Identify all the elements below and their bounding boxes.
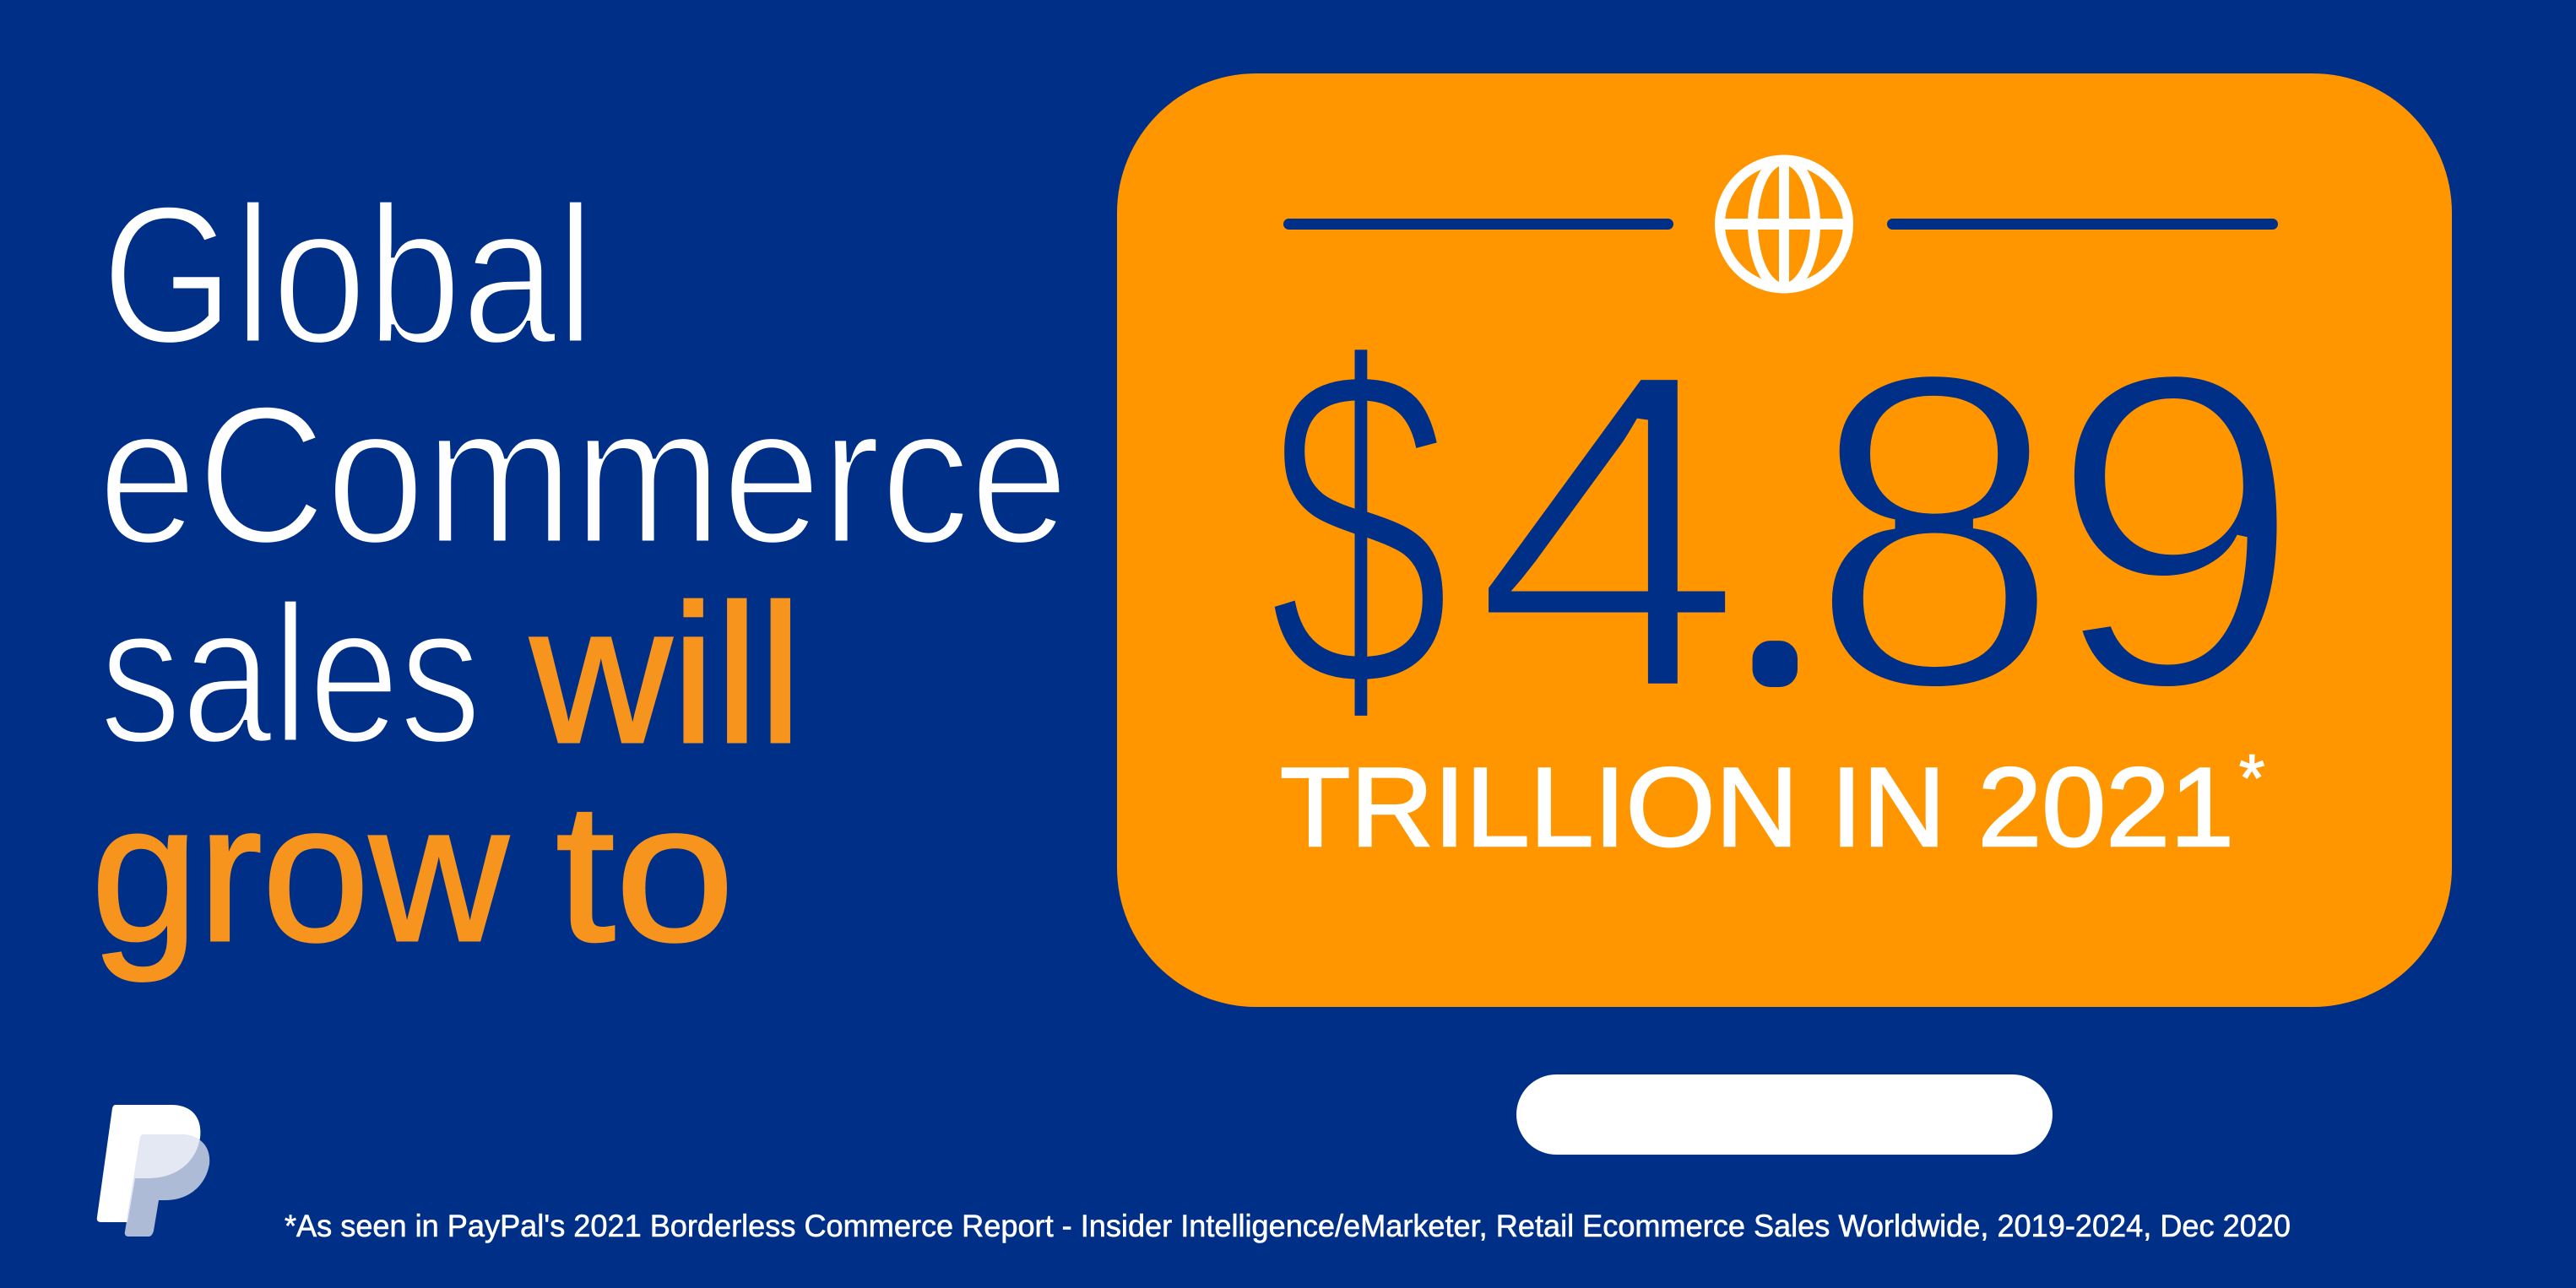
heading line: Global: Global <box>101 165 594 385</box>
heading highlight: will: will <box>529 565 802 784</box>
glyph: eight: 8 <box>1807 279 2063 783</box>
icon: PayPal logo <box>97 1105 209 1237</box>
icon: globe <box>1720 160 1848 289</box>
pill: white redacted bar <box>1516 1074 2053 1155</box>
heading <box>91 165 1069 982</box>
logo overlap <box>127 1134 199 1222</box>
glyph: nine: 9 <box>2047 278 2304 783</box>
heading line: eCommerce: eCommerce <box>98 365 1069 585</box>
footnote: *As seen in PayPal's 2021 Borderless Commerce Report - Insider Intelligence/eMarketer, Retail Ecommerce Sales Worldwide, 2019-2024, Dec 2020 <box>285 1209 2291 1243</box>
footnote asterisk: * <box>2239 740 2264 814</box>
big number: $4.89 <box>1266 268 2304 787</box>
heading highlight: grow: grow <box>91 763 509 982</box>
heading line: sales: sales <box>100 565 481 784</box>
divider line left <box>1283 219 1673 230</box>
logo back P <box>125 1134 209 1237</box>
glyph: point: . <box>1761 578 1789 691</box>
panel: orange stat card <box>1117 73 2452 1007</box>
subtitle: trillion in 2021: TRILLION IN 2021 <box>1280 745 2234 870</box>
logo front P <box>97 1105 200 1222</box>
glyph: dollar: $ <box>1266 268 1452 787</box>
divider line right <box>1887 219 2278 230</box>
glyph: four: 4 <box>1472 276 1745 786</box>
heading highlight: to: to <box>556 763 735 982</box>
